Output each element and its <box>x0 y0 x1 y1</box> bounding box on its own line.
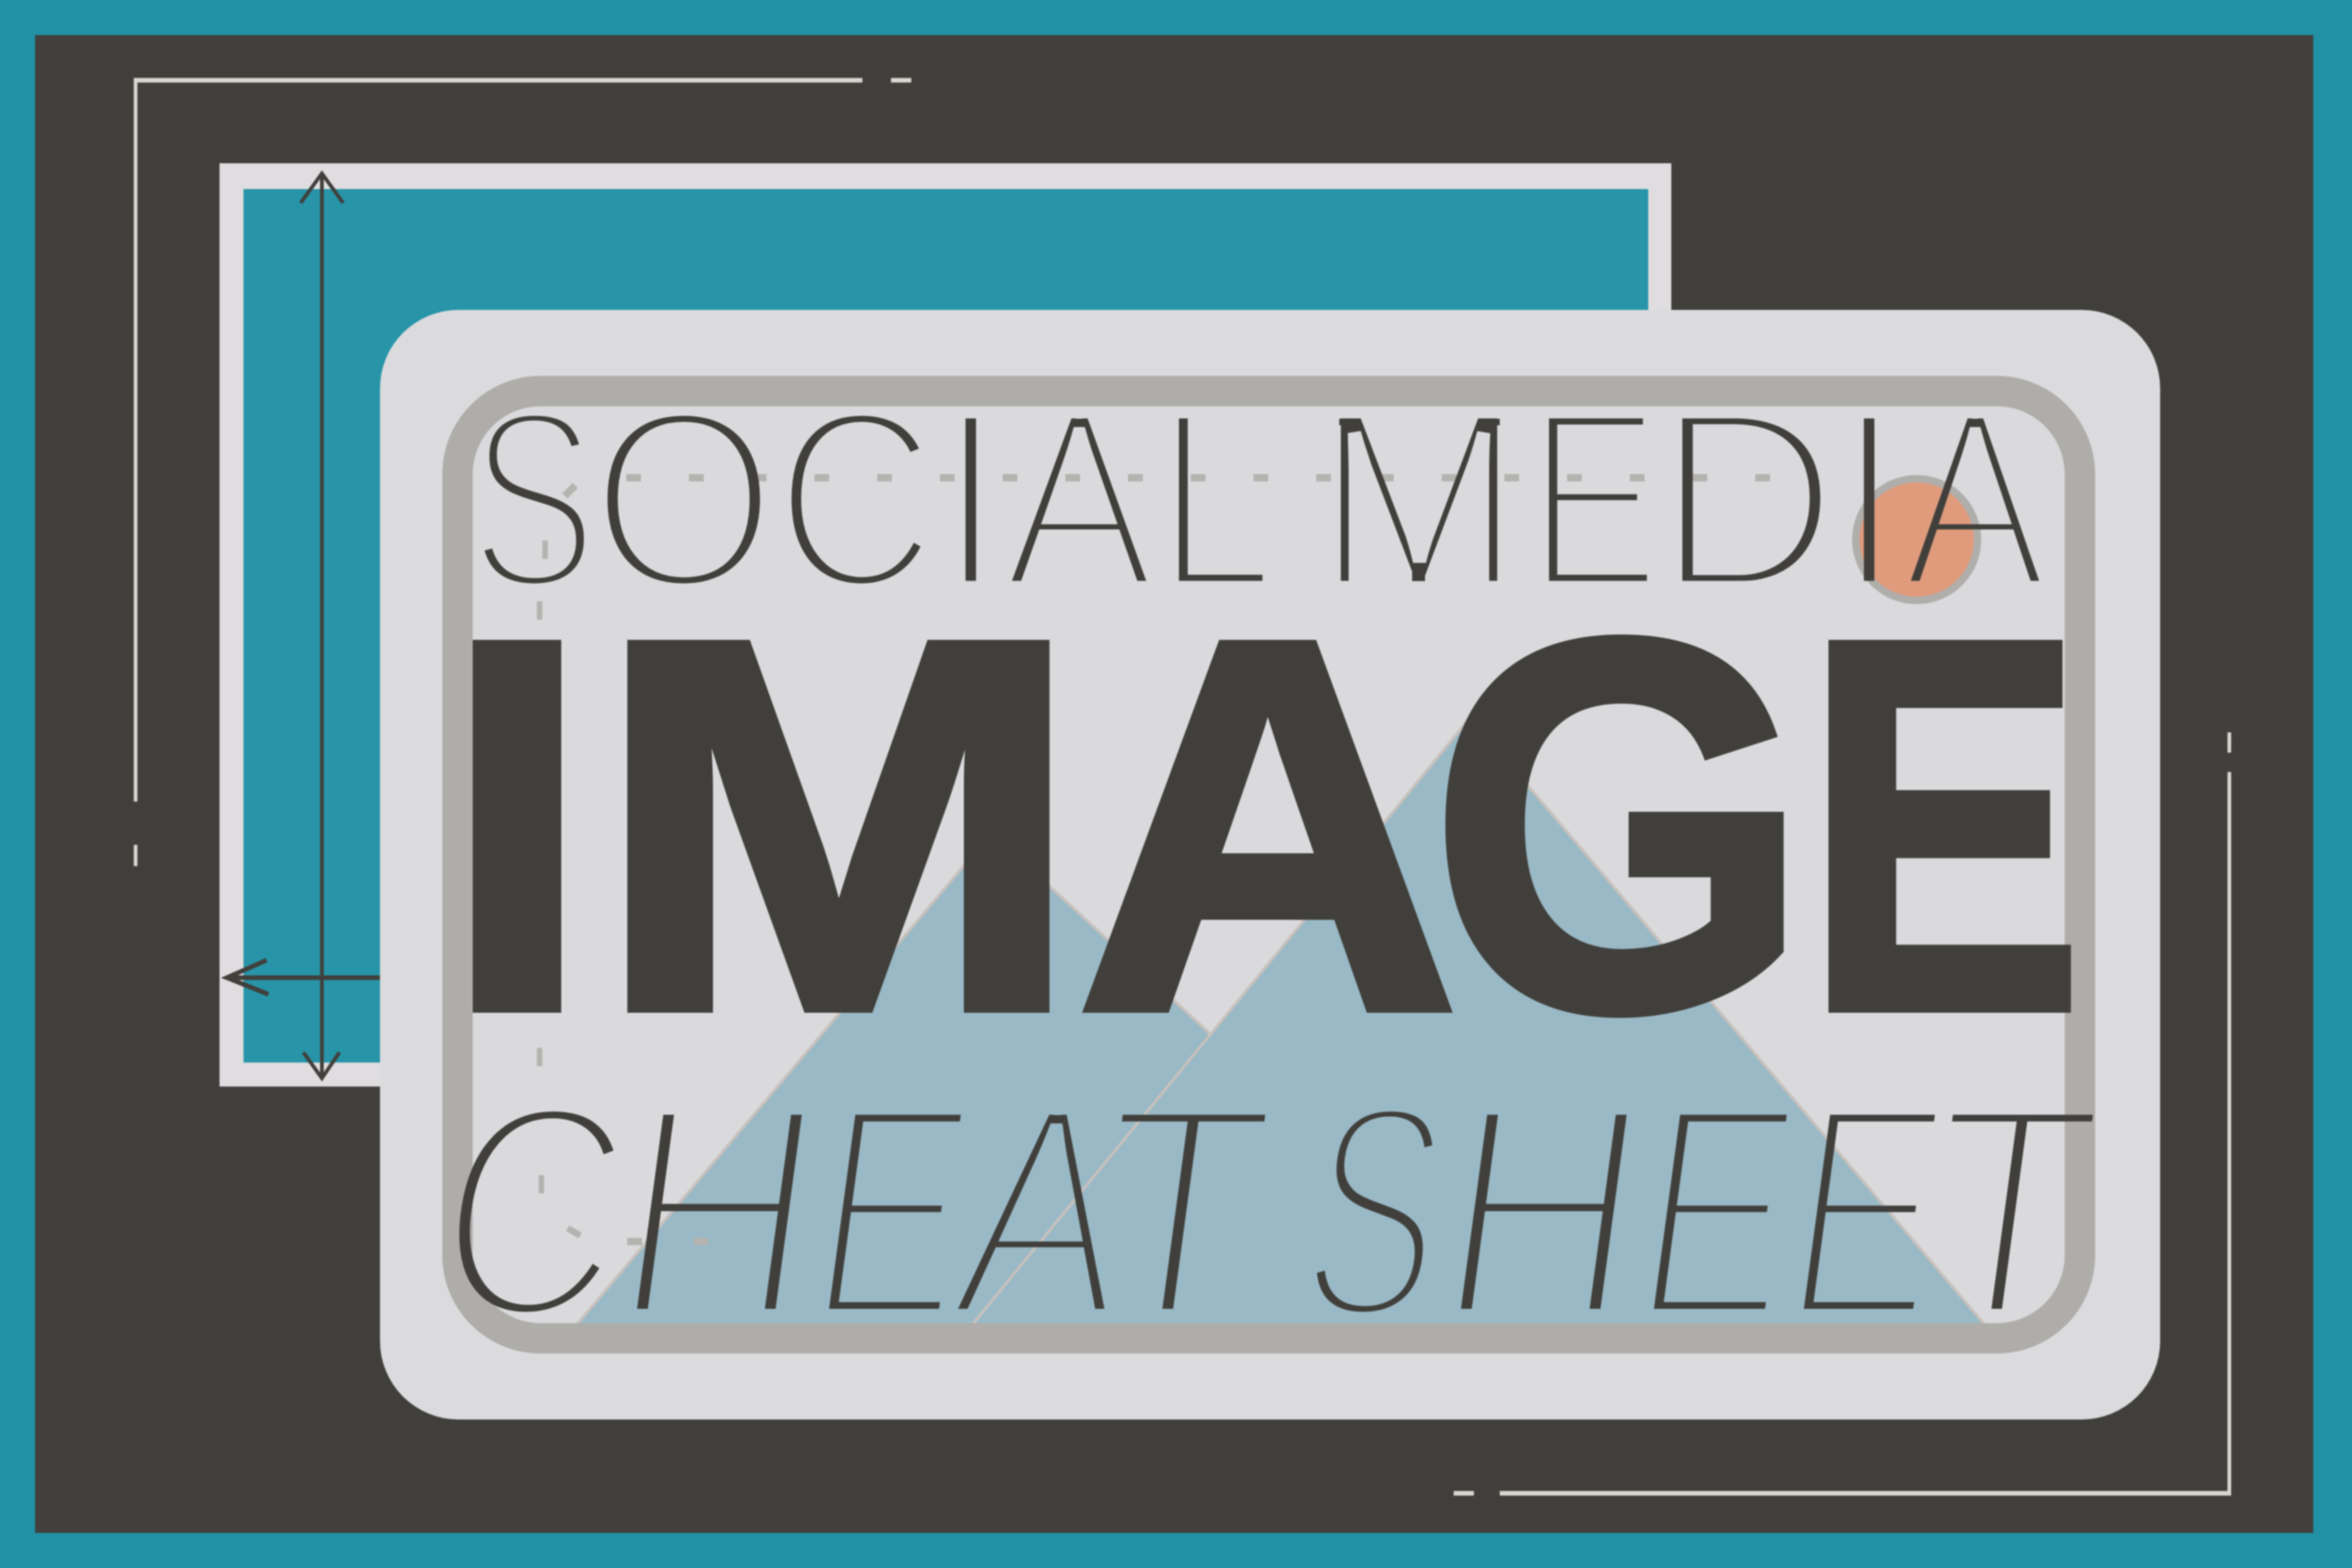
corner line: top left <box>134 78 911 866</box>
heading line: IMAGE: A <box>1075 530 1460 1121</box>
heading line: CHEAT SHEET: E <box>1769 1039 1966 1383</box>
inner panel fill <box>457 391 2080 1338</box>
heading line: IMAGE: M <box>593 530 1084 1121</box>
main rounded card <box>380 310 2160 1420</box>
heading line: SOCIAL MEDIA: I <box>1834 356 1905 642</box>
heading line: SOCIAL MEDIA: C <box>774 356 937 642</box>
heading line: CHEAT SHEET: S <box>1286 1039 1467 1383</box>
heading line: CHEAT SHEET: E <box>794 1039 992 1383</box>
dashed guide lines <box>537 478 1779 1245</box>
icon: sun circle <box>1856 479 1978 600</box>
heading line: SOCIAL MEDIA: O <box>589 356 778 642</box>
heading line: CHEAT SHEET: H <box>1420 1039 1667 1383</box>
heading line: SOCIAL MEDIA: M <box>1313 356 1525 642</box>
heading line: CHEAT SHEET: T <box>1073 1039 1289 1383</box>
icon: left mountain <box>574 833 1384 1328</box>
heading line: SOCIAL MEDIA: A <box>1902 356 2049 642</box>
heading line: CHEAT SHEET: H <box>597 1039 842 1383</box>
icon: right mountain <box>969 718 1988 1328</box>
inner rounded image frame <box>457 391 2080 1338</box>
back image frame <box>220 163 1671 1087</box>
heading line: IMAGE: E <box>1804 530 2084 1121</box>
arrow: vertical dimension <box>301 173 343 1078</box>
heading line: IMAGE: I <box>441 530 593 1121</box>
heading line: SOCIAL MEDIA: D <box>1655 356 1839 642</box>
heading line: SOCIAL MEDIA: I <box>935 356 1006 642</box>
heading line: SOCIAL MEDIA: E <box>1527 356 1660 642</box>
heading line: SOCIAL MEDIA: A <box>1003 356 1157 642</box>
heading line: CHEAT SHEET: A <box>937 1039 1153 1383</box>
heading line: CHEAT SHEET: T <box>1903 1039 2117 1383</box>
heading line: SOCIAL MEDIA: L <box>1156 356 1278 642</box>
heading line: CHEAT SHEET: C <box>418 1039 649 1383</box>
heading line: CHEAT SHEET: E <box>1619 1039 1817 1383</box>
arrow: horizontal dimension <box>227 960 387 994</box>
heading line: IMAGE: G <box>1430 530 1810 1121</box>
corner line: bottom right <box>1454 732 2231 1495</box>
heading line: SOCIAL MEDIA: S <box>469 356 598 642</box>
